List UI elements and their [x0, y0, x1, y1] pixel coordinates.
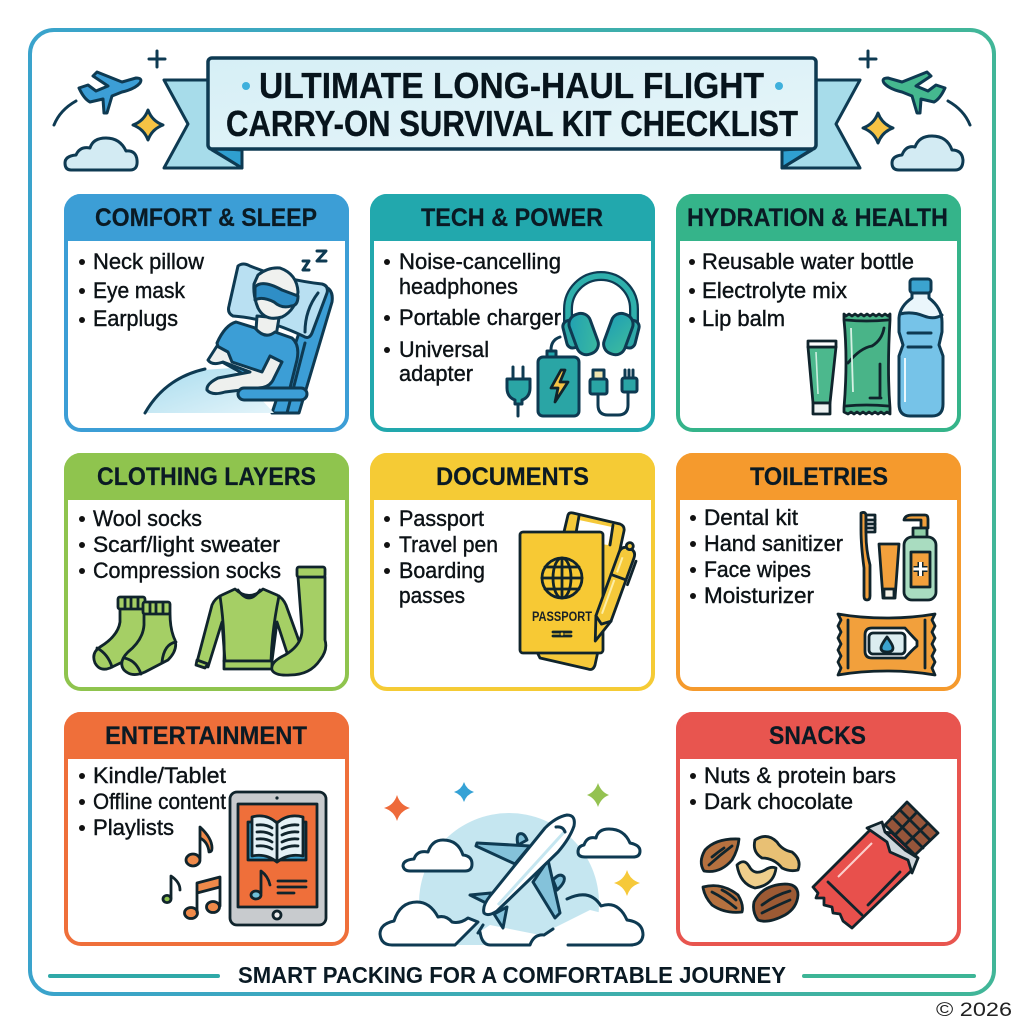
- checklist: Kindle/Tablet: [93, 763, 226, 788]
- heading: TECH & POWER: [421, 204, 603, 232]
- sparkles: [384, 795, 410, 821]
- checklist: [79, 763, 226, 840]
- icon: wipes packet: [838, 614, 935, 675]
- icon: passport: PASSPORT: [532, 609, 593, 624]
- icon: water bottle: [899, 279, 943, 416]
- icon: flight arc: [54, 101, 76, 125]
- upper right cloud: [578, 829, 640, 857]
- checklist: Compression socks: [93, 558, 281, 583]
- panel: clothing layers: [66, 455, 347, 689]
- icon: nuts: [701, 836, 799, 921]
- bottom right cloud: [478, 910, 643, 945]
- heading: COMFORT & SLEEP: [95, 204, 317, 232]
- heading: TOILETRIES: [750, 463, 888, 491]
- checklist: Universal: [399, 337, 489, 362]
- checklist: Electrolyte mix: [702, 278, 847, 303]
- sky circle: [419, 813, 599, 945]
- icon: plus: [860, 51, 876, 67]
- icon: compression sock: [272, 567, 326, 675]
- icon: USB cable: [590, 370, 637, 415]
- checklist: Dark chocolate: [704, 789, 853, 814]
- checklist: Playlists: [93, 815, 174, 840]
- footer: [48, 962, 976, 988]
- panel: toiletries: [678, 455, 959, 689]
- upper left cloud: [403, 840, 472, 871]
- icon: boarding passes: [536, 513, 624, 670]
- checklist: Neck pillow: [93, 249, 204, 274]
- checklist: [79, 506, 281, 583]
- header banner: [164, 58, 860, 168]
- icon: blue plane: [79, 72, 141, 113]
- icon: airplane: [470, 815, 574, 928]
- checklist: [689, 249, 914, 331]
- icon: cloud: [892, 136, 963, 170]
- icon: sparkle: [863, 113, 893, 143]
- icon: sleeping passenger: [145, 251, 332, 413]
- title: CARRY-ON SURVIVAL KIT CHECKLIST: [226, 103, 798, 144]
- checklist: Hand sanitizer: [704, 531, 843, 556]
- icon: green plane: [883, 72, 945, 113]
- icon: electrolyte sachet: [844, 314, 890, 414]
- panel: documents: [372, 455, 653, 689]
- icon: cloud: [65, 138, 137, 170]
- checklist: Wool socks: [93, 506, 202, 531]
- checklist: Earplugs: [93, 306, 178, 331]
- icon: sparkle: [133, 110, 163, 140]
- icon group: right header decorations: [860, 51, 970, 170]
- checklist: adapter: [399, 361, 473, 386]
- bottom left cloud: [380, 902, 478, 945]
- icon: plug: [507, 367, 530, 416]
- checklist: Moisturizer: [704, 583, 814, 608]
- panel: tech and power: [372, 196, 653, 430]
- checklist: Passport: [399, 506, 484, 531]
- icon: hand sanitizer: [904, 515, 936, 600]
- checklist: passes: [399, 583, 465, 608]
- heading: SNACKS: [769, 722, 866, 750]
- illustration: plane in clouds: [380, 782, 643, 948]
- heading: DOCUMENTS: [436, 463, 589, 491]
- checklist: Face wipes: [704, 557, 811, 582]
- checklist: Offline content: [93, 789, 226, 814]
- panel: hydration and health: [678, 196, 959, 430]
- checklist: [384, 506, 498, 608]
- checklist: Lip balm: [702, 306, 785, 331]
- footer text: SMART PACKING FOR A COMFORTABLE JOURNEY: [238, 962, 786, 988]
- checklist: Travel pen: [399, 532, 498, 557]
- icon group: left header decorations: [54, 51, 165, 170]
- icon: flight arc: [948, 101, 970, 125]
- icon: headphones: [562, 276, 640, 358]
- icon: power bank: [538, 337, 579, 416]
- title: ULTIMATE LONG-HAUL FLIGHT: [259, 65, 764, 106]
- copyright: © 2026: [936, 1000, 1012, 1021]
- icon: toothbrush: [861, 512, 875, 600]
- icon: plus: [149, 51, 165, 67]
- checklist: Portable charger: [399, 305, 561, 330]
- checklist: [79, 249, 204, 331]
- checklist: [384, 249, 561, 386]
- heading: ENTERTAINMENT: [105, 722, 307, 750]
- checklist: Dental kit: [704, 505, 798, 530]
- heading: CLOTHING LAYERS: [97, 463, 316, 491]
- trail lines: [478, 925, 483, 933]
- checklist: Noise-cancelling: [399, 249, 561, 274]
- icon: passport: [520, 532, 603, 653]
- icon: lip balm tube: [808, 341, 836, 414]
- panel: entertainment: [66, 714, 347, 944]
- checklist: headphones: [399, 274, 518, 299]
- checklist: Eye mask: [93, 278, 186, 303]
- panel: comfort and sleep: [66, 196, 347, 430]
- left ribbon tail: [164, 80, 242, 168]
- icon: chocolate bar: [813, 802, 938, 928]
- right ribbon tail: [782, 80, 860, 168]
- title: [226, 65, 798, 144]
- checklist: Scarf/light sweater: [93, 532, 280, 557]
- checklist: Boarding: [399, 558, 485, 583]
- checklist: [690, 763, 896, 814]
- panel: snacks: [678, 714, 959, 944]
- banner plate: [208, 58, 816, 149]
- icon: pen: [588, 540, 641, 645]
- icon: tablet: [230, 792, 326, 925]
- checklist: Reusable water bottle: [702, 249, 914, 274]
- icon: sweater: [196, 589, 303, 669]
- icon: music notes: [163, 827, 220, 918]
- checklist: Nuts & protein bars: [704, 763, 896, 788]
- icon: pair of wool socks: [94, 597, 176, 675]
- icon: toothpaste tube: [879, 544, 899, 598]
- heading: HYDRATION & HEALTH: [687, 204, 948, 232]
- checklist: [690, 505, 843, 608]
